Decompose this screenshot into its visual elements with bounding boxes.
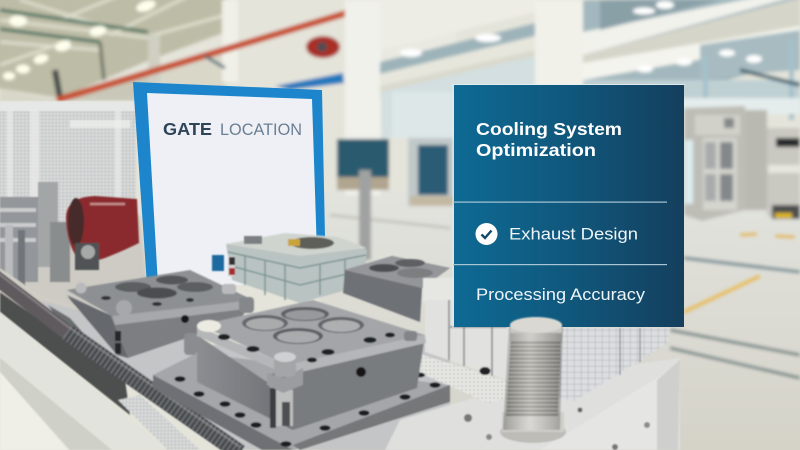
ceiling lights [3, 0, 157, 80]
blue header strip [275, 73, 344, 90]
sign text: GATE: GATE [163, 119, 212, 139]
red fan [306, 36, 340, 58]
sign text: LOCATION: LOCATION [220, 121, 302, 139]
red motor [66, 196, 139, 265]
central pillar [345, 0, 381, 195]
machine parts left [0, 182, 139, 300]
heat-sink block [417, 278, 670, 403]
wall columns [148, 35, 160, 97]
icon: check mark [476, 223, 498, 245]
checklist item: exhaust design [476, 223, 638, 245]
mold left [67, 270, 254, 358]
orange ceiling beam [57, 0, 400, 100]
gap under rod [0, 292, 130, 415]
white machine rail [0, 312, 168, 450]
white machine base [385, 358, 680, 450]
base plate with holes [153, 353, 450, 450]
right structure [380, 0, 800, 140]
panel heading: Cooling System [476, 119, 622, 139]
panel heading: Optimization [476, 140, 596, 160]
blue sign board with GATE LOCATION label [133, 82, 325, 285]
checklist item: exhaust design: Exhaust Design [509, 224, 638, 244]
cylinder top overlapping panel [510, 317, 562, 333]
distant machines behind panel [392, 92, 454, 138]
panel heading [476, 119, 622, 160]
floor [320, 190, 800, 450]
floor left [0, 215, 150, 312]
mold front [184, 300, 426, 430]
mold rear right [343, 256, 450, 322]
list item: processing accuracy: Processing Accuracy [476, 285, 646, 304]
post behind sign [359, 170, 371, 260]
threaded rod [0, 271, 240, 450]
hall lights [400, 1, 762, 72]
info panel: cooling system optimization [453, 84, 685, 328]
transparent block rear [212, 233, 367, 303]
mesh strip under rod [118, 395, 200, 450]
safety fence [0, 101, 136, 230]
right machine cabinets [684, 106, 800, 221]
divider [453, 264, 667, 265]
table plate [40, 300, 450, 450]
yellow and teal floor lines [740, 234, 795, 237]
beige ground strip left [0, 268, 200, 370]
divider [453, 202, 667, 203]
ceiling trusses, left [0, 0, 226, 112]
threaded cylinder [500, 325, 566, 443]
foreground: machine table and molds [0, 233, 680, 450]
